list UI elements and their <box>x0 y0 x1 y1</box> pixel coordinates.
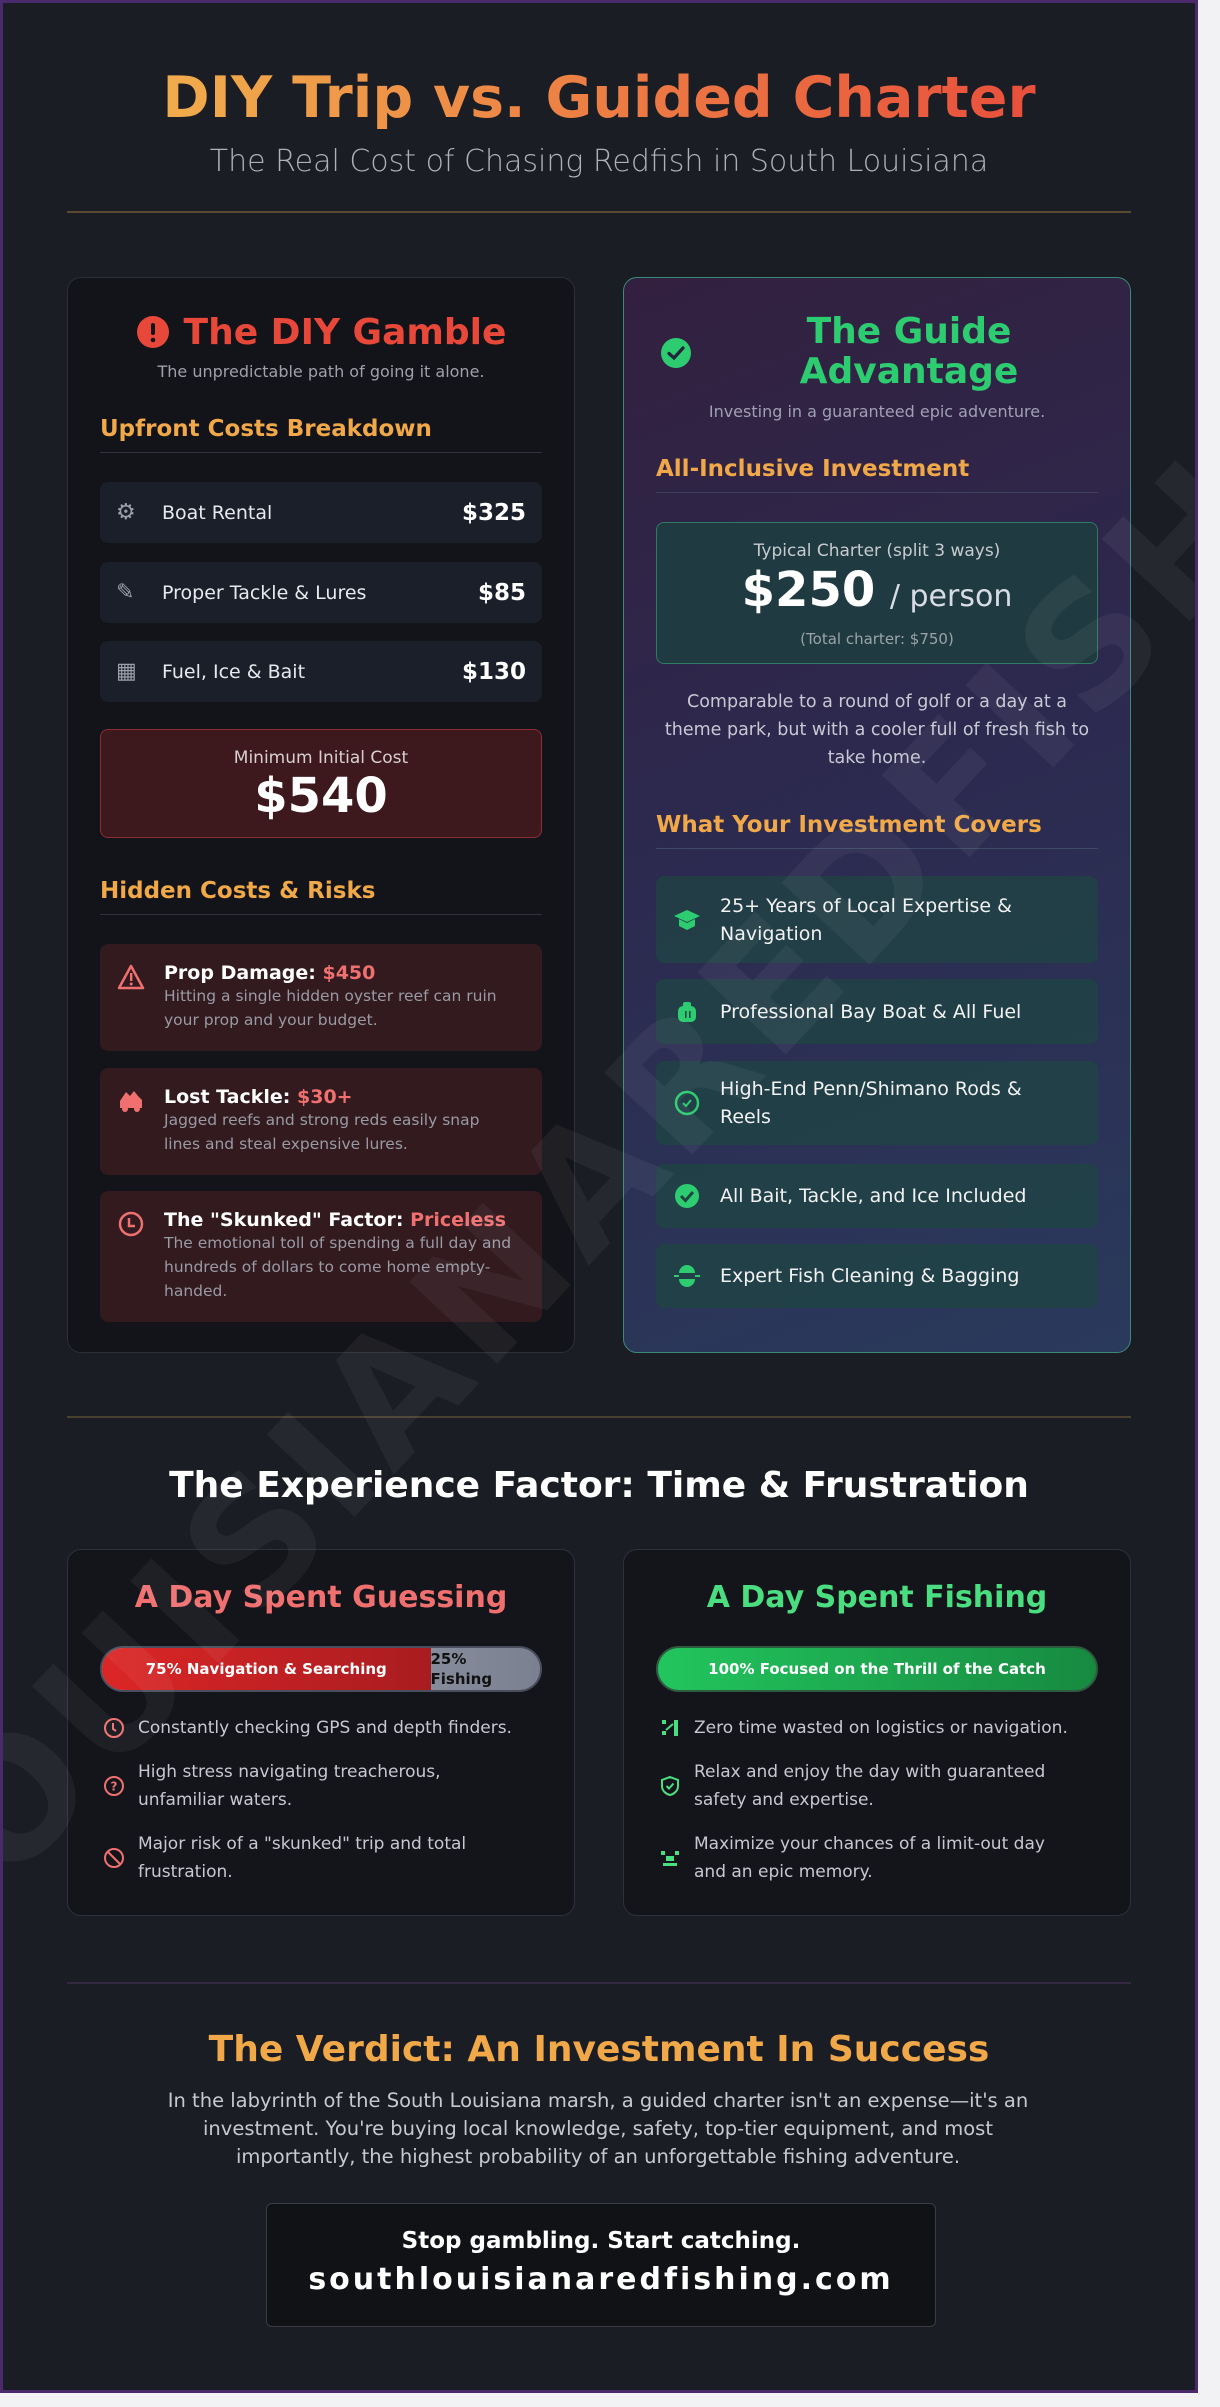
risk: skunked <box>100 1191 542 1322</box>
comparison text: Comparable to a round of golf or a day at a theme park, but with a cooler full of fresh fish to take home. <box>665 692 1089 768</box>
panel heading: guide: The Guide <box>807 311 1011 352</box>
panel heading: guide <box>800 311 1018 392</box>
cost rows <box>100 482 542 543</box>
min cost box: Minimum Initial Cost <box>234 748 408 768</box>
panel: day spent guessing: High stress navigating treacherous, unfamiliar waters. <box>138 1762 441 1810</box>
section heading: experience: The Experience Factor: Time & Frustration <box>169 1465 1029 1506</box>
min cost box: $540 <box>254 768 388 824</box>
subtitle: The unpredictable path of going it alone. <box>157 362 484 381</box>
list items: Zero time wasted on logistics or navigation. <box>694 1718 1068 1738</box>
CTA box: southlouisianaredfishing.com <box>308 2262 894 2297</box>
heading: upfront <box>100 416 542 453</box>
panel: DIY Gamble: ▦ <box>116 659 137 684</box>
panel: day spent fishing: Maximize your chances of a limit-out day and an epic memory. <box>694 1834 1045 1882</box>
heading: all-inclusive: All-Inclusive Investment <box>656 456 969 482</box>
price box: Typical Charter (split 3 ways) <box>754 541 1000 561</box>
risk: skunked: The "Skunked" Factor: Priceless <box>164 1209 506 1231</box>
panel: day spent fishing: Relax and enjoy the day with guaranteed safety and expertise. <box>694 1762 1045 1810</box>
panel: DIY Gamble: ✎ <box>116 580 134 605</box>
CTA box <box>266 2203 936 2327</box>
heading: A Day Spent Guessing <box>135 1580 507 1615</box>
panel heading: guide: Advantage <box>800 351 1018 392</box>
risk: tackle: Lost Tackle: $30+ <box>164 1086 353 1108</box>
price box: (Total charter: $750) <box>800 630 954 648</box>
heading: A Day Spent Fishing <box>707 1580 1047 1615</box>
panel: Guide Advantage: Professional Bay Boat & All Fuel <box>720 1000 1021 1022</box>
bar: 100%: 100% Focused on the Thrill of the Catch <box>708 1660 1046 1678</box>
panel: Guide Advantage: Expert Fish Cleaning & Bagging <box>720 1265 1019 1287</box>
panel: DIY Gamble: $130 <box>462 658 526 684</box>
risk: tackle: Jagged reefs and strong reds easily snap lines and steal expensive lures. <box>164 1111 479 1153</box>
bar: 75/25: 25% <box>430 1650 466 1668</box>
bar: 100% <box>656 1646 1098 1692</box>
cost rows: $325 <box>462 500 526 526</box>
panel: Guide Advantage <box>623 277 1131 1353</box>
cost rows: Boat Rental <box>162 502 272 524</box>
heading: hidden: Hidden Costs & Risks <box>100 878 375 904</box>
risk: skunked: The emotional toll of spending a full day and hundreds of dollars to come home empty-handed. <box>164 1234 511 1300</box>
bar: 75/25: 75% Navigation & Searching <box>146 1660 387 1678</box>
panel: Guide Advantage: All Bait, Tackle, and Ice Included <box>720 1185 1026 1207</box>
panel: day spent guessing: Major risk of a "skunked" trip and total frustration. <box>138 1834 466 1882</box>
risk: tackle <box>100 1068 542 1175</box>
panel: DIY Gamble: $85 <box>478 580 526 606</box>
subtitle: The Real Cost of Chasing Redfish in South Louisiana <box>210 144 988 179</box>
list items: Constantly checking GPS and depth finders. <box>138 1718 512 1738</box>
heading: covers: What Your Investment Covers <box>656 812 1042 838</box>
panel: DIY Gamble: Proper Tackle & Lures <box>162 582 366 604</box>
heading: hidden <box>100 878 542 915</box>
risk: prop: Hitting a single hidden oyster reef can ruin your prop and your budget. <box>164 987 497 1029</box>
risk: prop <box>100 944 542 1051</box>
panel heading: DIY: The DIY Gamble <box>184 312 506 353</box>
bar: 75/25: Fishing <box>430 1670 492 1688</box>
panel: day spent fishing <box>623 1549 1131 1916</box>
panel: DIY Gamble: Fuel, Ice & Bait <box>162 660 305 682</box>
cover items: 25+ Years of Local Expertise & Navigation <box>720 894 1012 944</box>
bar: 75/25 <box>100 1646 542 1692</box>
subtitle: Investing in a guaranteed epic adventure. <box>709 402 1045 421</box>
price box <box>656 522 1098 664</box>
panel: day spent guessing <box>67 1549 575 1916</box>
verdict paragraph: In the labyrinth of the South Louisiana marsh, a guided charter isn't an expense—it's an investment. You're buying local knowledge, safety, top-tier equipment, and most importantly, the highest probability of an unforgettable fishing adventure. <box>168 2089 1028 2168</box>
heading: all-inclusive <box>656 456 1098 493</box>
heading: verdict: The Verdict: An Investment In Success <box>209 2029 989 2070</box>
min cost box <box>100 729 542 838</box>
heading: covers <box>656 812 1098 849</box>
cover items <box>656 876 1098 963</box>
panel: day spent guessing: ? <box>111 1780 118 1794</box>
title: DIY Trip vs. Guided Charter <box>162 65 1036 131</box>
risk: prop: Prop Damage: $450 <box>164 962 375 984</box>
icon: check <box>661 338 691 368</box>
heading: upfront: Upfront Costs Breakdown <box>100 416 432 442</box>
price box: $250 / person <box>742 562 1012 618</box>
CTA box: Stop gambling. Start catching. <box>402 2228 800 2254</box>
cost rows: ⚙ <box>116 500 136 525</box>
panel: Guide Advantage: High-End Penn/Shimano Rods & Reels <box>720 1078 1022 1128</box>
panel: DIY Gamble <box>67 277 575 1353</box>
